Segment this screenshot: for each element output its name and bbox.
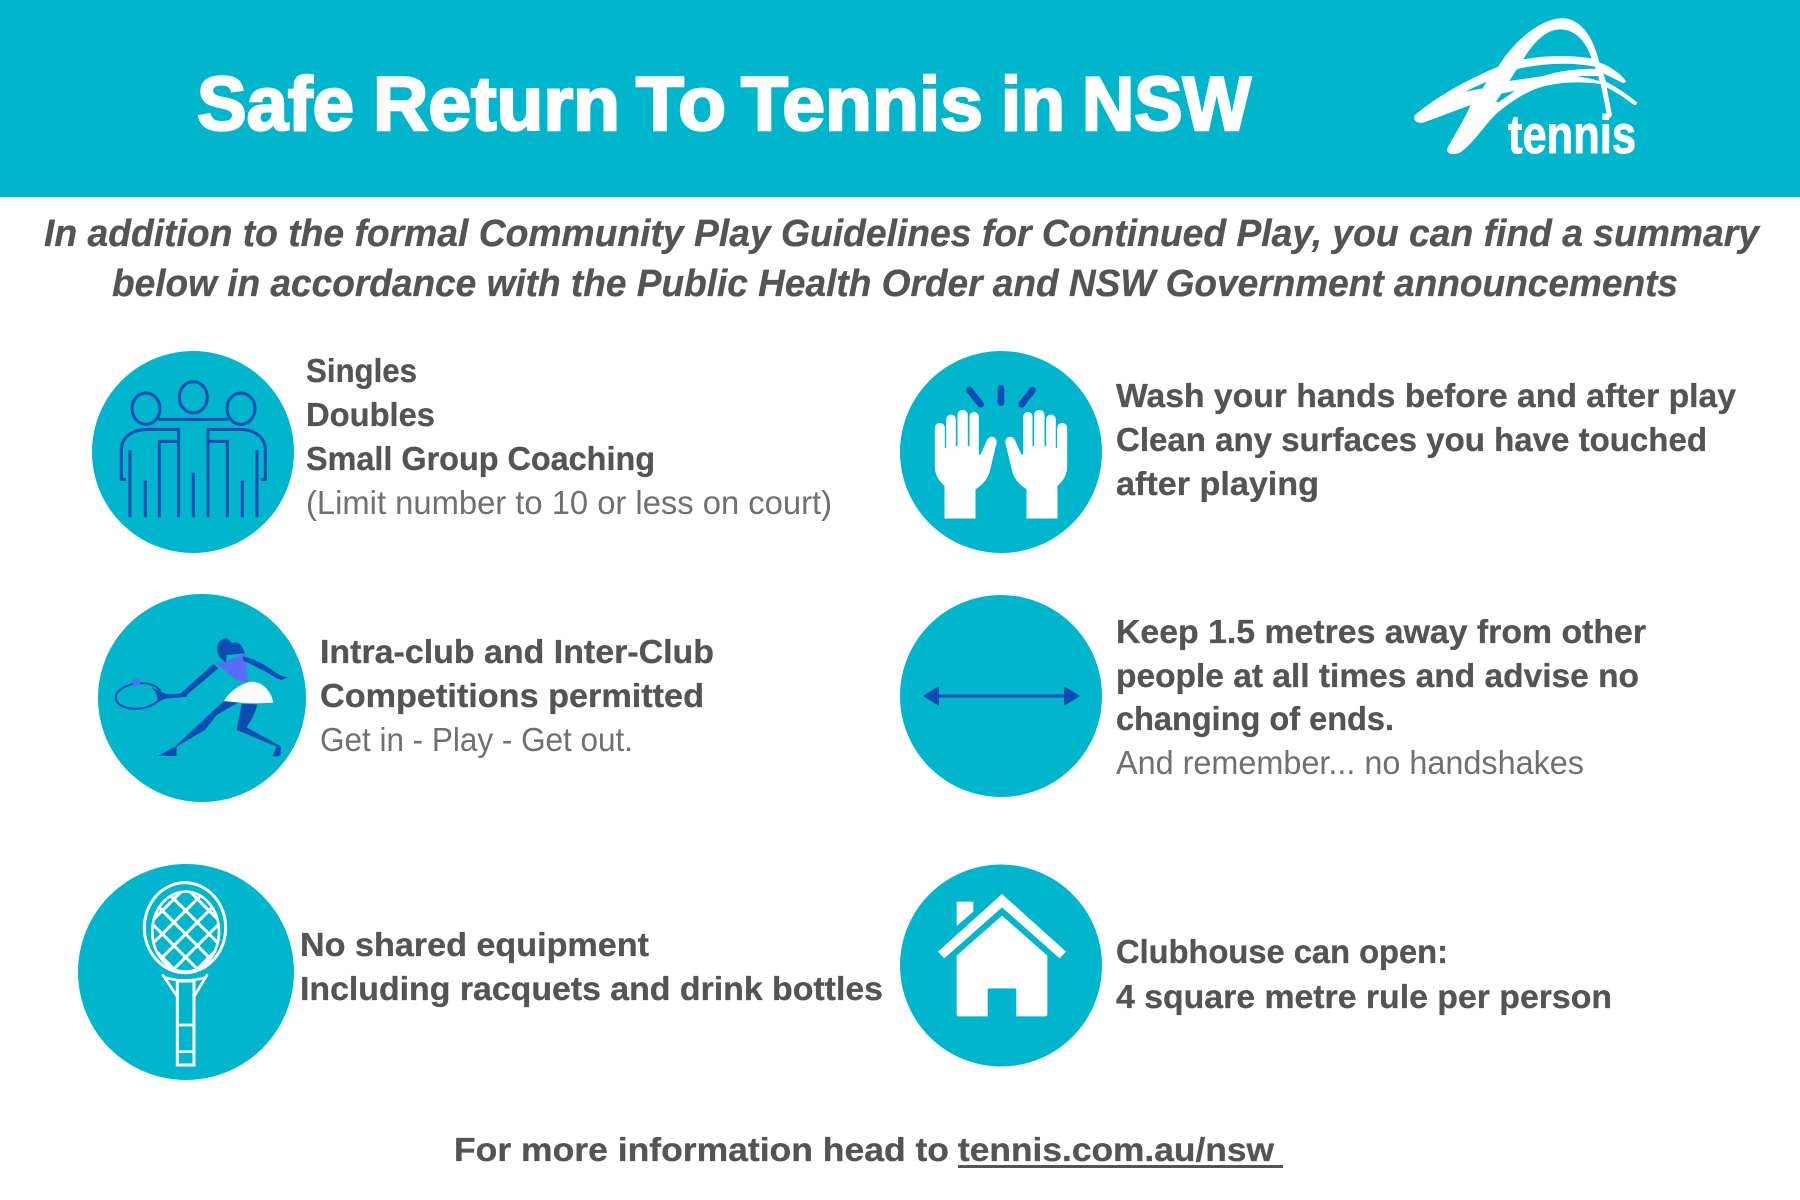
panel: competitions	[98, 594, 714, 802]
icon: distance arrow	[900, 595, 1102, 797]
tennis logo	[1414, 18, 1637, 165]
text: competitions: Intra-club and Inter-Club	[320, 634, 714, 671]
text: distancing: changing of ends.	[1116, 701, 1394, 738]
text: equipment: No shared equipment	[300, 927, 649, 964]
title: To	[636, 62, 726, 147]
footer link: tennis.com.au/nsw	[958, 1132, 1275, 1169]
title: NSW	[1082, 62, 1251, 147]
text: distancing: Keep 1.5 metres away from other	[1116, 614, 1646, 651]
text: clubhouse: 4 square metre rule per person	[1116, 979, 1612, 1016]
text: competitions: Get in - Play - Get out.	[320, 721, 633, 758]
footer link: For more information head to	[454, 1132, 949, 1169]
text: formats: Doubles	[306, 397, 435, 434]
icon: raised hands	[900, 351, 1102, 553]
text: formats: (Limit number to 10 or less on court)	[306, 484, 832, 521]
text: distancing: And remember... no handshakes	[1116, 744, 1584, 781]
title: Return	[373, 62, 620, 147]
panel: group size	[92, 351, 832, 553]
text: clubhouse: Clubhouse can open:	[1116, 934, 1448, 971]
text: formats	[306, 353, 832, 521]
title	[197, 62, 1251, 147]
title: Safe	[197, 62, 354, 147]
icon: racquet	[78, 864, 294, 1080]
panel: distancing	[900, 595, 1646, 797]
panel: clubhouse	[900, 864, 1612, 1066]
panel: equipment	[78, 864, 883, 1080]
text: hygiene: Clean any surfaces you have touched	[1116, 422, 1707, 459]
text: formats: Singles	[306, 353, 417, 390]
text: equipment	[300, 927, 883, 1008]
panel: hygiene	[900, 351, 1736, 553]
intro text	[44, 213, 1761, 305]
text: formats: Small Group Coaching	[306, 441, 655, 478]
text: competitions: Competitions permitted	[320, 678, 704, 715]
footer link	[454, 1132, 1283, 1169]
title: in	[1001, 62, 1065, 147]
text: hygiene: Wash your hands before and after play	[1116, 378, 1736, 415]
intro text: In addition to the formal Community Play Guidelines for Continued Play, you can find a summary	[44, 213, 1761, 255]
text: clubhouse	[1116, 934, 1612, 1016]
text: competitions	[320, 634, 714, 758]
text: distancing: people at all times and advise no	[1116, 658, 1639, 695]
text: hygiene: after playing	[1116, 466, 1319, 503]
title: Tennis	[741, 62, 983, 147]
text: distancing	[1116, 614, 1646, 781]
icon: people	[92, 351, 294, 553]
tennis logo: tennis	[1508, 105, 1636, 165]
icon: tennis player	[98, 594, 306, 802]
intro text: below in accordance with the Public Health Order and NSW Government announcements	[112, 263, 1678, 305]
icon: house	[900, 864, 1102, 1066]
text: equipment: Including racquets and drink bottles	[300, 971, 883, 1008]
header banner	[0, 0, 1800, 197]
text: hygiene	[1116, 378, 1736, 503]
